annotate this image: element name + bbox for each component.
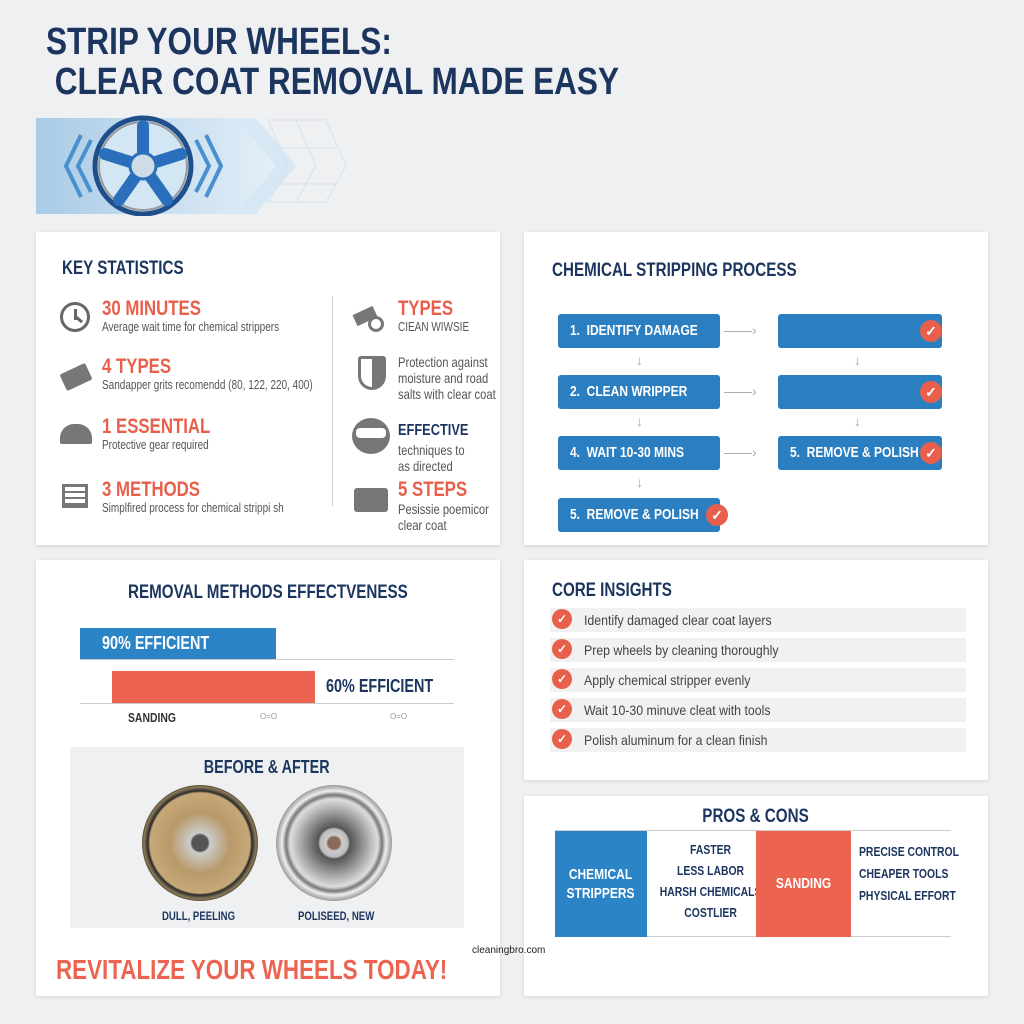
stat: protection [398,354,496,402]
step 5 right [778,436,942,470]
step 2 [558,375,720,409]
stat: 30 minutes [102,297,279,334]
table: STRIPPERS [567,885,635,902]
arrows: ↓ [854,413,861,429]
icon: shield [358,356,386,390]
stat: protection: moisture and road [398,370,488,386]
panel: pros and cons [524,796,988,996]
insights list: Polish aluminum for a clean finish [584,732,768,748]
stat: 3 methods [102,478,284,515]
icon: tool [352,306,384,332]
table: FASTER [690,842,731,857]
before and after panel [70,747,464,928]
arrows: ↓ [636,474,643,490]
stat: protection: Protection against [398,354,488,370]
icon: mask [352,418,390,454]
panel: key statistics [36,232,500,545]
panel: removal methods effectiveness [36,560,500,996]
heading: key statistics: KEY STATISTICS [62,258,184,279]
insights list: ✓ [557,732,567,746]
stat: 5 steps: clear coat [398,517,447,533]
watermark: cleaningbro.com [472,945,545,956]
stat: 3 methods: 3 METHODS [102,478,200,501]
stat: 1 essential: 1 ESSENTIAL [102,415,210,438]
insights list [550,608,966,752]
step 5: 5. REMOVE & POLISH [570,506,699,523]
heading: pros & cons: PROS & CONS [703,806,809,827]
step 5 [558,498,720,532]
stat: 4 types [102,355,313,392]
insights list: Identify damaged clear coat layers [584,612,772,628]
bar chart: SANDING [128,710,176,725]
stat: 4 types: Sandapper grits recomendd (80, 122, 220, 400) [102,378,313,392]
stat: effective: as directed [398,458,453,474]
stat: 5 steps [398,478,489,533]
step 4: 4. WAIT 10-30 MINS [570,444,684,461]
before and after panel: POLISEED, NEW [298,909,374,923]
arrows: ↓ [636,352,643,368]
panel: chemical stripping process: ✓ [925,384,937,400]
step 2: 2. CLEAN WRIPPER [570,383,687,400]
arrows: ↓ [636,413,643,429]
step box right 1 [778,314,942,348]
insights list: Wait 10-30 minuve cleat with tools [584,702,770,718]
insights list: Prep wheels by cleaning thoroughly [584,642,779,658]
table: PHYSICAL EFFORT [859,888,956,903]
stat: effective: techniques to [398,442,465,458]
insights list: ✓ [557,642,567,656]
table: PRECISE CONTROL [859,844,959,859]
table: LESS LABOR [677,863,744,878]
icon: list [62,484,88,508]
title [46,21,619,103]
panel: core insights [524,560,988,780]
hero banner: wheel icon [36,116,346,216]
title: CLEAR COAT REMOVAL MADE EASY [55,61,619,103]
stat: 30 minutes: 30 MINUTES [102,297,201,320]
stat: types: TYPES [398,297,453,320]
stat: 5 steps: Pesissie poemicor [398,501,489,517]
panel: chemical stripping process [524,232,988,545]
stat: types [398,297,469,334]
step 5 right: 5. REMOVE & POLISH [790,444,919,461]
table: CHEMICAL [569,866,633,883]
title: STRIP YOUR WHEELS: [46,21,392,63]
heading: process: CHEMICAL STRIPPING PROCESS [552,260,797,281]
before and after panel: BEFORE & AFTER [204,757,330,777]
stat: effective: EFFECTIVE [398,422,468,439]
insights list: Apply chemical stripper evenly [584,672,750,688]
heading: core insights: CORE INSIGHTS [552,580,672,601]
stat: types: CIEAN WIWSIE [398,320,469,334]
arrows: ——› [724,383,757,399]
icon: gear [60,424,92,444]
insights list: ✓ [557,672,567,686]
arrows: ——› [724,322,757,338]
stat: protection: salts with clear coat [398,386,496,402]
bar chart: O=O [260,712,277,721]
icon: sandpaper [60,363,92,391]
before and after panel: DULL, PEELING [162,909,235,923]
insights list: ✓ [557,612,567,626]
stat: 5 steps: 5 STEPS [398,478,467,501]
step 1 [558,314,720,348]
table: SANDING [776,875,831,892]
step 1: 1. IDENTIFY DAMAGE [570,322,698,339]
stat: 4 types: 4 TYPES [102,355,171,378]
heading: removal methods: REMOVAL METHODS EFFECTVENESS [128,582,408,603]
bar chart: 90% EFFICIENT [102,633,209,653]
arrows: ——› [724,444,757,460]
insights list: ✓ [557,702,567,716]
stat: effective [398,422,468,474]
icon: toolbox [354,488,388,512]
arrows: ↓ [854,352,861,368]
stat: 1 essential [102,415,210,452]
panel: chemical stripping process: ✓ [925,323,937,339]
arrows [636,322,861,490]
table: HARSH CHEMICALS [660,884,761,899]
table [555,830,951,937]
icon: clock [60,302,90,332]
wheel before [142,785,258,901]
panel: chemical stripping process: ✓ [925,445,937,461]
call to action: REVITALIZE YOUR WHEELS TODAY! [56,954,447,985]
step 4 [558,436,720,470]
panel: chemical stripping process: ✓ [711,507,723,523]
stat: 1 essential: Protective gear required [102,438,209,452]
bar chart: O=O [390,712,407,721]
table: COSTLIER [684,905,737,920]
bar chart [80,628,454,725]
table: CHEAPER TOOLS [859,866,948,881]
stat: 3 methods: Simplfired process for chemical strippi sh [102,501,284,515]
bar chart: 60% EFFICIENT [326,676,433,696]
stat: 30 minutes: Average wait time for chemical strippers [102,320,279,334]
wheel after [276,785,392,901]
